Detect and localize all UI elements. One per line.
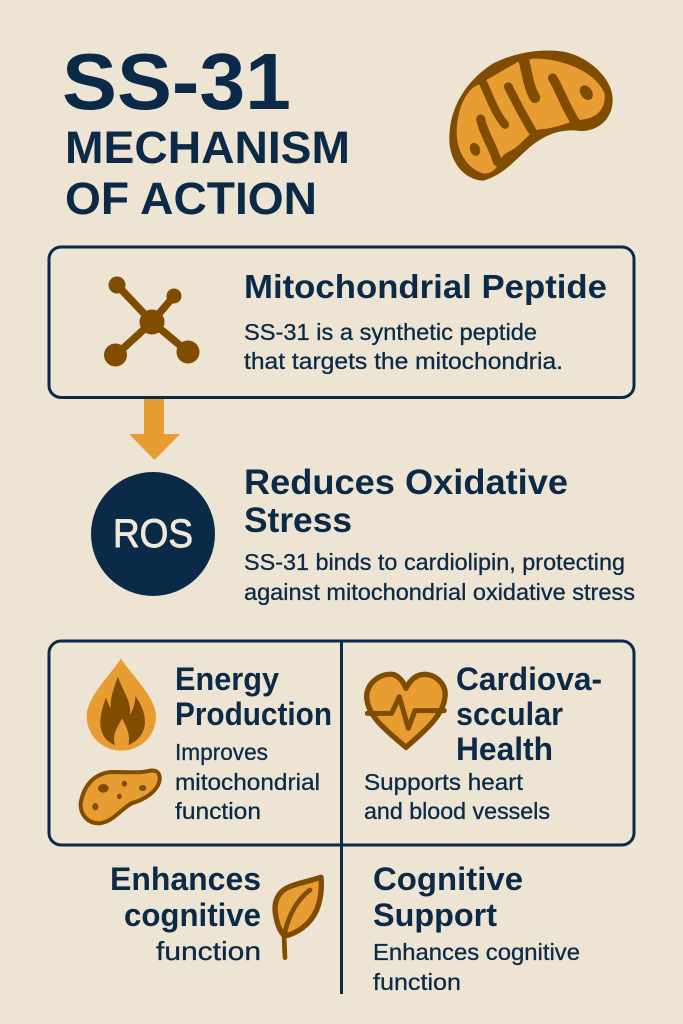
icon: organ bbox=[81, 770, 160, 823]
text: energy description: Improves bbox=[175, 739, 268, 765]
divider bbox=[340, 641, 343, 994]
heading: energy production: Energy bbox=[175, 661, 279, 697]
heading: cardiovascular health: sccular bbox=[456, 696, 563, 732]
text: oxidative stress description: SS-31 binds to cardiolipin, protecting bbox=[244, 549, 625, 575]
text: cardiovascular description bbox=[364, 769, 550, 824]
heading: cardiovascular health: Cardiova- bbox=[456, 661, 602, 697]
title: MECHANISM bbox=[65, 122, 350, 173]
heading: cardiovascular health bbox=[456, 661, 602, 767]
text: energy description: mitochondrial bbox=[175, 769, 320, 795]
heading: reduces oxidative stress bbox=[244, 463, 568, 540]
heading: enhances cognitive function: Enhances bbox=[110, 861, 261, 897]
heading: enhances cognitive function: function bbox=[156, 936, 261, 966]
panel: benefits grid bbox=[49, 641, 634, 845]
text: oxidative stress description bbox=[244, 549, 635, 605]
icon: mitochondrion bbox=[449, 50, 613, 181]
title bbox=[62, 37, 350, 224]
text: cognitive description: function bbox=[373, 969, 461, 995]
text: peptide description: SS-31 is a synthetic peptide bbox=[244, 319, 537, 345]
icon: ROS circle: ROS bbox=[113, 512, 193, 556]
icon: ROS circle bbox=[91, 472, 215, 596]
text: cognitive description: Enhances cognitive bbox=[373, 939, 580, 965]
text: cardiovascular description: Supports heart bbox=[364, 769, 524, 795]
heading: energy production bbox=[175, 661, 332, 732]
heading: reduces oxidative stress: Stress bbox=[244, 501, 352, 540]
panel: mitochondrial peptide bbox=[49, 247, 634, 398]
heading: cognitive support: Support bbox=[373, 897, 497, 933]
icon: flame drop bbox=[87, 658, 156, 751]
heading: cardiovascular health: Health bbox=[456, 731, 553, 767]
icon: leaf bbox=[275, 877, 321, 958]
text: oxidative stress description: against mitochondrial oxidative stress bbox=[244, 579, 635, 605]
heading: energy production: Production bbox=[175, 696, 332, 732]
text: energy description: function bbox=[175, 798, 261, 824]
text: cardiovascular description: and blood vessels bbox=[364, 798, 550, 824]
title: SS-31 bbox=[62, 37, 291, 126]
text: peptide description bbox=[244, 319, 563, 374]
icon: heart bbox=[367, 674, 445, 747]
heading: enhances cognitive function bbox=[110, 861, 261, 966]
title: OF ACTION bbox=[65, 173, 317, 224]
text: peptide description: that targets the mitochondria. bbox=[244, 348, 563, 374]
heading: mitochondrial peptide: Mitochondrial Peptide bbox=[244, 268, 607, 305]
icon: molecule bbox=[104, 276, 200, 366]
heading: enhances cognitive function: cognitive bbox=[124, 897, 261, 933]
text: energy description bbox=[175, 739, 320, 824]
heading: cognitive support: Cognitive bbox=[373, 861, 523, 897]
heading: reduces oxidative stress: Reduces Oxidative bbox=[244, 463, 568, 502]
text: cognitive description bbox=[373, 939, 580, 995]
arrow bbox=[129, 399, 180, 460]
heading: cognitive support bbox=[373, 861, 523, 933]
